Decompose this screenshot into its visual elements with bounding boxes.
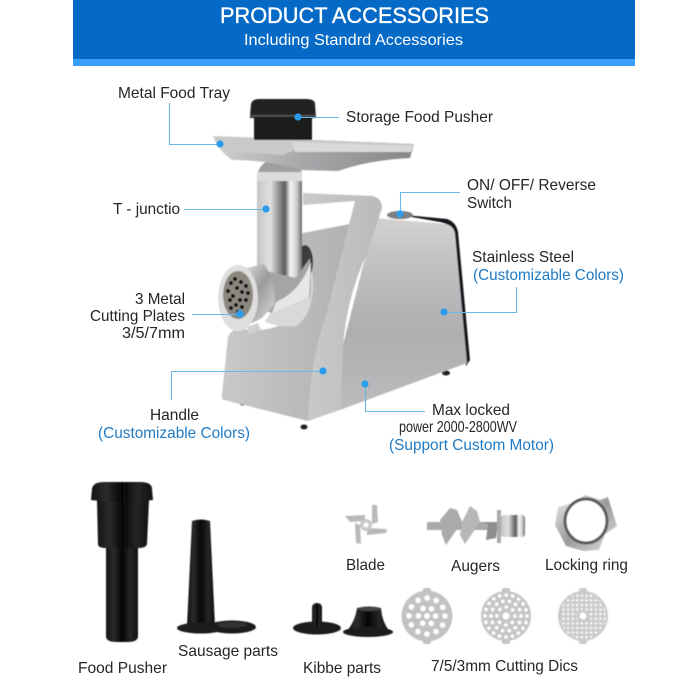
throat <box>258 156 302 172</box>
accessory: food pusher <box>78 482 168 677</box>
callout: cutting plates <box>90 291 244 342</box>
accessory: blade: Blade <box>346 557 385 574</box>
accessory: food pusher: Food Pusher <box>78 660 168 677</box>
accessory: sausage parts: Sausage parts <box>178 643 278 660</box>
callout: switch: ON/ OFF/ Reverse <box>467 177 596 194</box>
callout: storage food pusher: Storage Food Pusher <box>346 109 494 126</box>
callout: handle: (Customizable Colors) <box>98 425 250 442</box>
body side panel <box>340 218 467 410</box>
heading: PRODUCT ACCESSORIES <box>220 3 489 28</box>
elbow <box>245 258 311 313</box>
callout: cutting plates: 3/5/7mm <box>122 325 185 342</box>
cutting disc 7mm <box>402 588 452 644</box>
accessory: kibbe parts <box>293 603 393 677</box>
callout: switch: Switch <box>467 195 512 212</box>
label: cutting discs: 7/5/3mm Cutting Dics <box>431 658 578 675</box>
cutting disc 3mm <box>558 588 608 644</box>
callout: T-junction: T - junctio <box>113 201 180 218</box>
plate outlet <box>218 265 258 331</box>
header banner <box>73 0 635 66</box>
cutting disc 5mm <box>481 588 531 644</box>
callout: cutting plates: 3 Metal <box>135 291 185 308</box>
feet <box>240 400 246 406</box>
accessory: kibbe parts: Kibbe parts <box>303 660 381 677</box>
accessory: locking ring: Locking ring <box>545 557 628 574</box>
accessory: locking ring <box>545 495 628 574</box>
cutting head mouth <box>265 250 313 326</box>
meat grinder machine <box>213 99 470 430</box>
neck tube <box>257 172 302 278</box>
callout: metal food tray: Metal Food Tray <box>118 85 230 102</box>
callout: cutting plates: Cutting Plates <box>90 308 185 325</box>
food pusher on machine <box>250 99 316 140</box>
food tray <box>213 136 414 171</box>
callout: motor power <box>361 380 554 454</box>
handle strip <box>303 193 382 421</box>
callout: metal food tray <box>118 85 230 148</box>
callout: motor power: Max locked <box>432 402 510 419</box>
callout: stainless steel <box>440 249 624 316</box>
rear black edge <box>395 214 470 366</box>
body front panel <box>222 223 355 421</box>
callout: handle: Handle <box>150 407 199 424</box>
accessory: sausage parts <box>177 520 278 660</box>
subheading: Including Standrd Accessories <box>244 32 463 49</box>
accessory: augers <box>427 506 525 575</box>
callout: stainless steel: Stainless Steel <box>472 249 574 266</box>
callout: motor power: power 2000-2800WV <box>399 419 517 436</box>
callout: T-junction <box>113 201 270 218</box>
accessory: blade <box>345 505 387 574</box>
locking collar <box>236 264 275 326</box>
accessory: augers: Augers <box>451 558 500 575</box>
callout: handle <box>98 367 327 442</box>
callout: stainless steel: (Customizable Colors) <box>473 267 624 284</box>
switch <box>387 211 413 219</box>
callout: motor power: (Support Custom Motor) <box>389 437 554 454</box>
callout: switch <box>396 177 596 218</box>
